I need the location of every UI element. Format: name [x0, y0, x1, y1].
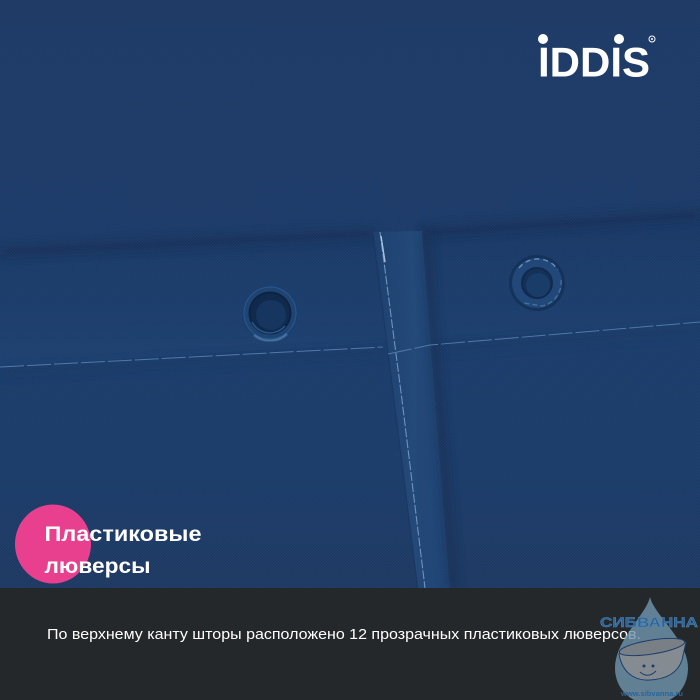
pleat: vertical fold with stitching: [373, 231, 454, 590]
text: caption: По верхнему канту шторы расположено 12 прозрачных пластиковых люверсов.: [47, 627, 641, 643]
icon: right plastic grommet: [509, 255, 565, 311]
icon: left plastic grommet: [242, 286, 298, 342]
watermark: brand name: СИБВАННА: [600, 615, 698, 630]
watermark: bathtub: [618, 635, 686, 680]
watermark: url: www.sibvanna.ru: [620, 689, 683, 698]
watermark: Сибванна bathtub drop: [600, 597, 698, 700]
logo: registered mark: [649, 36, 655, 42]
panel: dark caption band: [0, 588, 700, 700]
heading: Пластиковые люверсы: люверсы: [44, 554, 150, 578]
heading: Пластиковые люверсы: Пластиковые: [44, 522, 202, 546]
logo: IDDIS: IDDIS: [538, 38, 650, 86]
stitch line: hem seam left: [0, 347, 383, 367]
accent: pink blob behind heading: [15, 504, 91, 584]
stitch line: hem seam right: [388, 322, 700, 354]
heading: Пластиковые люверсы: [44, 522, 202, 578]
